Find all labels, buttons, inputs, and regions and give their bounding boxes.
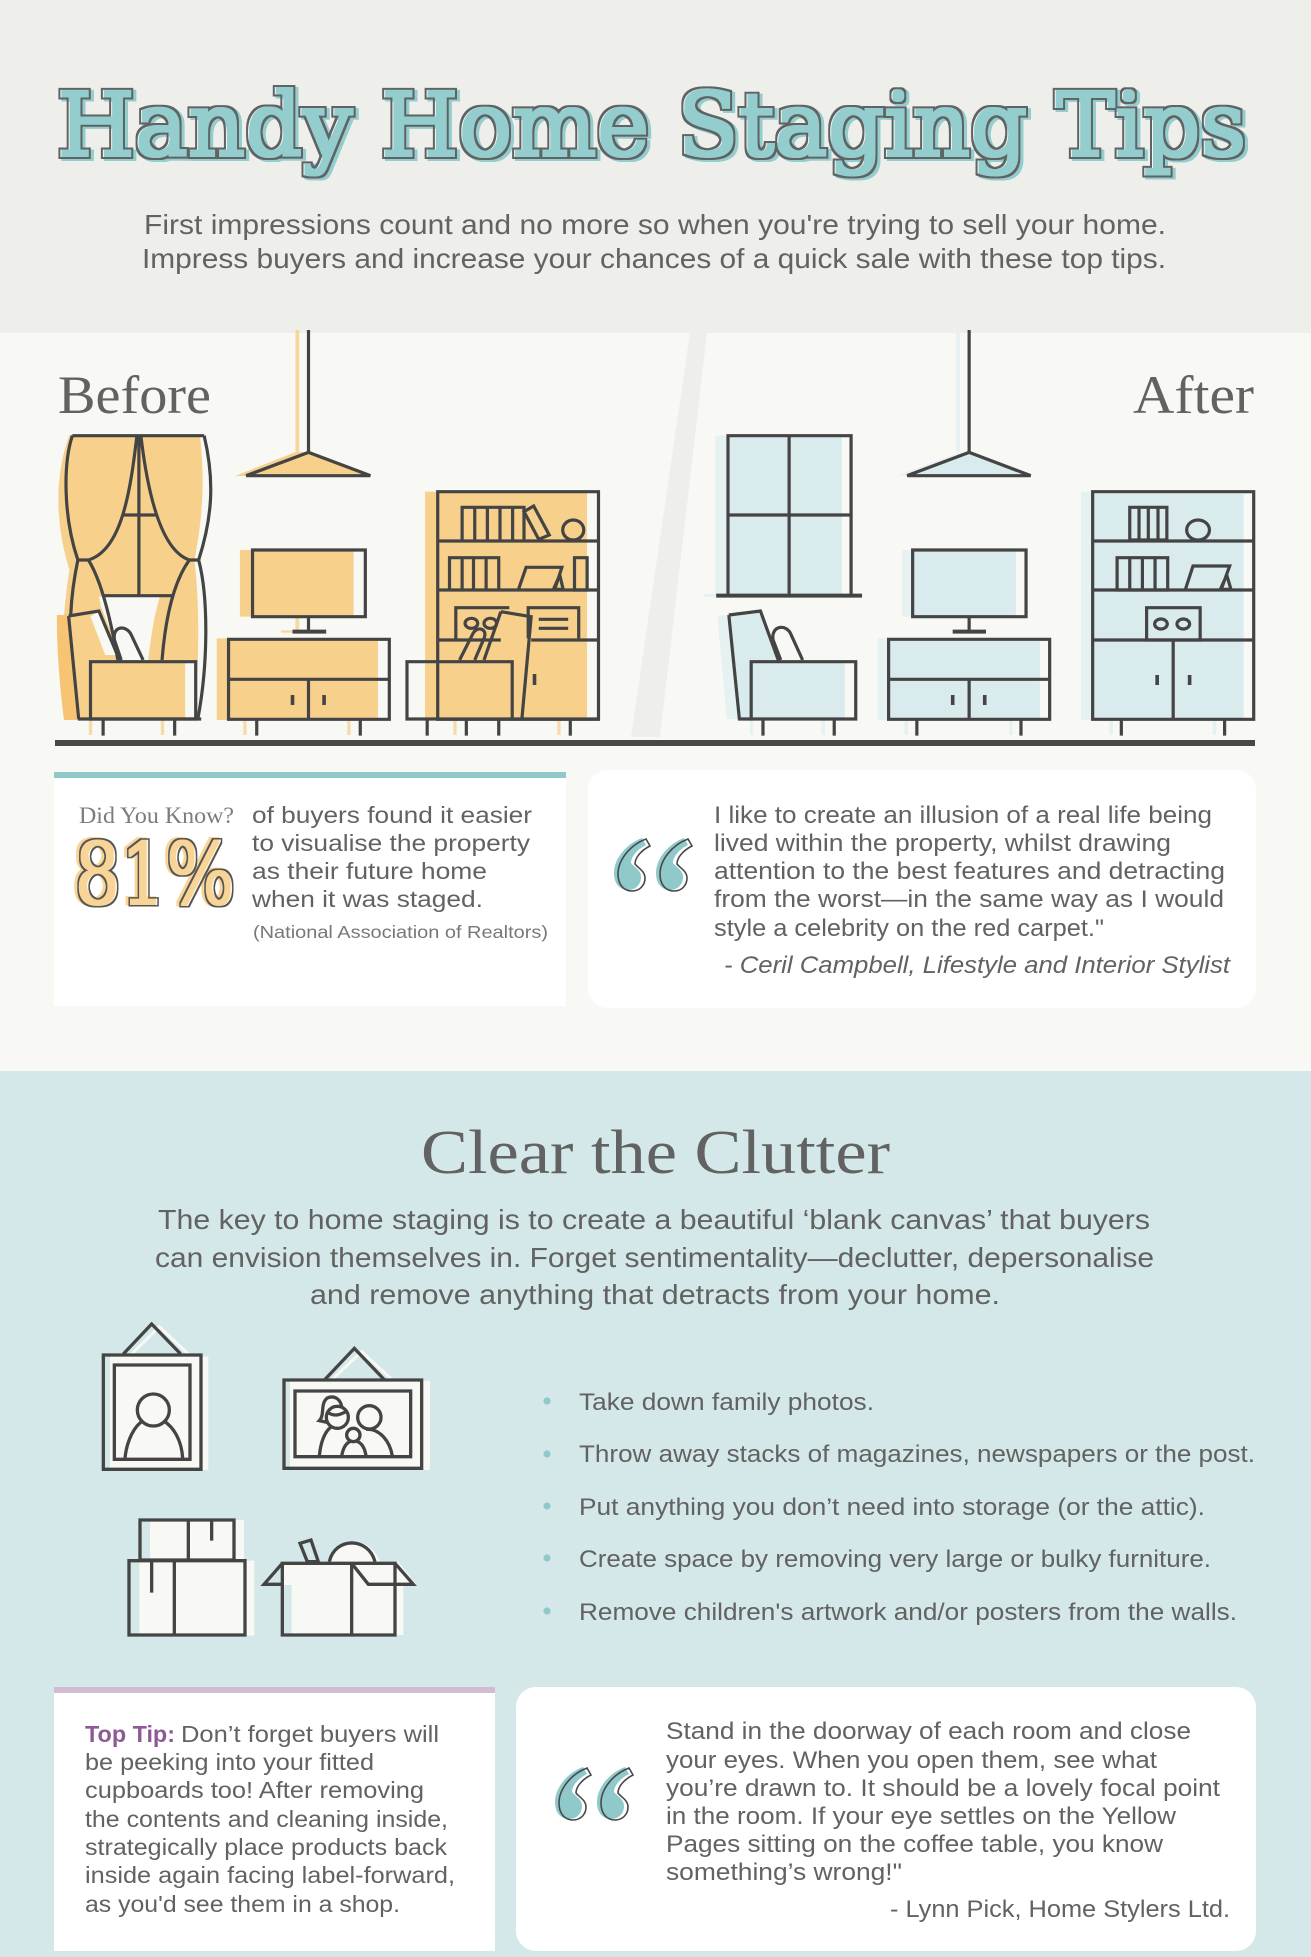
statistic description: to visualise the property: [252, 830, 530, 856]
icon: open box: [264, 1540, 417, 1635]
quote text: style a celebrity on the red carpet.": [714, 915, 1104, 942]
heading: Clear the Clutter: [421, 1119, 890, 1187]
source: (National Association of Realtors): [253, 922, 548, 942]
armchair left: [69, 611, 201, 736]
icon: portrait photo: [103, 1324, 208, 1470]
pendant lamp: [907, 330, 1031, 476]
statistic description: as their future home: [252, 858, 487, 884]
quote text: [714, 802, 1225, 942]
quote text: something’s wrong!": [666, 1859, 902, 1886]
pendant lamp: [246, 330, 370, 476]
icon: family photo: [284, 1348, 430, 1470]
quote attribution: - Ceril Campbell, Lifestyle and Interior Stylist: [724, 952, 1231, 979]
illustration: before room: [57, 330, 598, 736]
intro text: [142, 209, 1166, 274]
heading: before: Before: [58, 365, 211, 425]
checklist: Throw away stacks of magazines, newspapers or the post.: [579, 1441, 1255, 1468]
illustration: after room: [704, 330, 1254, 736]
quote text: your eyes. When you open them, see what: [666, 1747, 1157, 1774]
cluttered bookcase: [438, 492, 598, 736]
statistic description: of buyers found it easier: [252, 802, 532, 828]
quote text: lived within the property, whilst drawing: [714, 830, 1171, 857]
panel: top tip: [54, 1687, 495, 1951]
panel: did you know: [54, 772, 566, 1006]
quote text: in the room. If your eye settles on the Yellow: [666, 1803, 1177, 1830]
title: Handy Home Staging Tips: [57, 74, 1246, 176]
intro text: The key to home staging is to create a beautiful ‘blank canvas’ that buyers: [158, 1204, 1150, 1235]
floor line: [55, 740, 1255, 746]
quote text: attention to the best features and detracting: [714, 858, 1225, 885]
tidy bookcase: [1093, 492, 1254, 736]
checklist: Remove children's artwork and/or posters from the walls.: [579, 1599, 1237, 1626]
quote text: you’re drawn to. It should be a lovely focal point: [666, 1775, 1220, 1802]
statistic: 81%: 81%: [75, 826, 235, 925]
top tip text: Don’t forget buyers will: [181, 1721, 439, 1747]
quote text: [666, 1718, 1220, 1886]
armchair right: [407, 612, 598, 736]
heading: after: After: [1133, 365, 1254, 425]
quote text: Stand in the doorway of each room and close: [666, 1718, 1191, 1745]
top tip text: strategically place products back: [85, 1834, 447, 1860]
quote text: Pages sitting on the coffee table, you know: [666, 1831, 1164, 1858]
top tip text: cupboards too! After removing: [85, 1777, 424, 1803]
top tip text: the contents and cleaning inside,: [85, 1806, 448, 1832]
top tip text: inside again facing label-forward,: [85, 1862, 455, 1888]
checklist: Create space by removing very large or bulky furniture.: [579, 1546, 1211, 1573]
panel: home stylers quote: [516, 1687, 1256, 1951]
label: did you know: Did You Know?: [79, 803, 234, 828]
quote attribution: - Lynn Pick, Home Stylers Ltd.: [890, 1896, 1230, 1923]
curtains and window: [66, 436, 211, 719]
checklist: Put anything you don’t need into storage (or the attic).: [579, 1494, 1205, 1521]
statistic description: [251, 802, 532, 912]
checklist: Take down family photos.: [579, 1389, 874, 1416]
window: [716, 436, 862, 596]
icons: clutter: [103, 1324, 430, 1636]
top tip text: as you'd see them in a shop.: [85, 1891, 400, 1917]
top tip text: [85, 1721, 455, 1917]
quote text: from the worst—in the same way as I would: [714, 886, 1224, 913]
television: [253, 550, 365, 632]
top tip label: Top Tip:: [85, 1721, 175, 1747]
television: [913, 550, 1026, 632]
intro text: [155, 1204, 1154, 1310]
statistic description: when it was staged.: [251, 886, 483, 912]
armchair: [729, 611, 856, 736]
icon: quotation marks: [614, 838, 692, 891]
sideboard: [889, 639, 1050, 736]
top tip text: be peeking into your fitted: [85, 1749, 374, 1775]
quote text: I like to create an illusion of a real life being: [714, 802, 1212, 829]
intro text: can envision themselves in. Forget sentimentality—declutter, depersonalise: [155, 1242, 1154, 1273]
panel: header: [0, 0, 1311, 333]
intro text: Impress buyers and increase your chances of a quick sale with these top tips.: [142, 243, 1166, 274]
intro text: First impressions count and no more so when you're trying to sell your home.: [144, 209, 1166, 240]
checklist: [543, 1389, 1255, 1626]
icon: quotation marks: [555, 1767, 633, 1820]
panel: stylist quote: [588, 770, 1256, 1008]
sideboard: [229, 639, 389, 736]
icon: stacked boxes: [129, 1520, 254, 1636]
panel: clear the clutter: [0, 1071, 1311, 1957]
intro text: and remove anything that detracts from your home.: [310, 1279, 1000, 1310]
